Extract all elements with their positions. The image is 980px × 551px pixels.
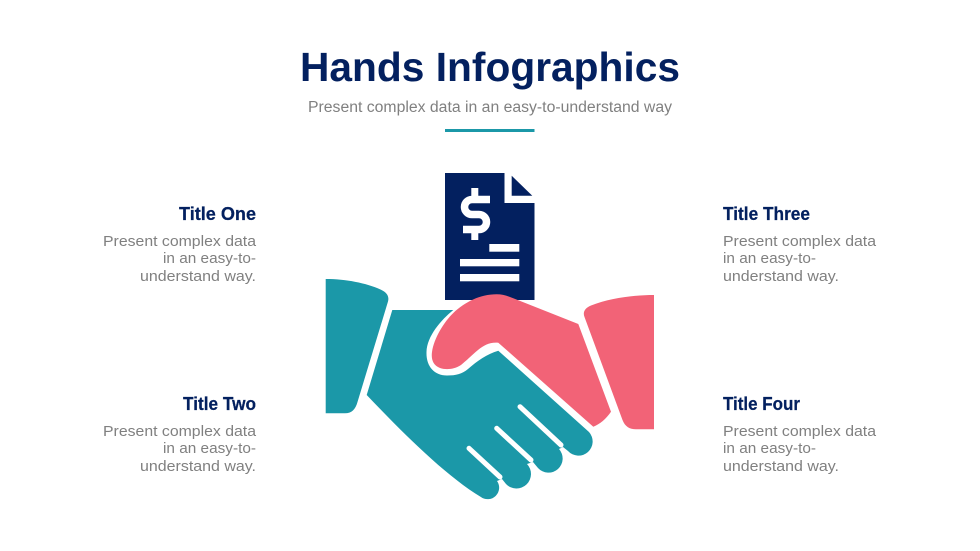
text block: Title One: understand way.	[140, 268, 256, 285]
finger gaps	[469, 407, 561, 477]
text block: Title Two: Title Two	[183, 394, 256, 414]
text block: Title One: Present complex data	[103, 233, 257, 250]
text block: Title Three: Title Three	[723, 204, 810, 224]
text block: Title Two: Present complex data	[103, 423, 257, 440]
text block: Title Three: in an easy-to-	[723, 250, 816, 267]
text block: Title One	[103, 204, 257, 285]
right cuff	[584, 295, 654, 429]
text block: Title Four: Title Four	[723, 394, 800, 414]
icon: invoice document with dollar sign	[445, 173, 534, 300]
text block: Title Two: in an easy-to-	[163, 440, 256, 457]
icon: handshake	[326, 279, 654, 499]
subtitle: Present complex data in an easy-to-understand way	[308, 99, 672, 116]
text block: Title One: Title One	[179, 204, 256, 224]
text block: Title Two: understand way.	[140, 458, 256, 475]
text block: Title Four	[723, 394, 877, 475]
text block: Title Four: Present complex data	[723, 423, 877, 440]
pink hand	[432, 294, 611, 427]
teal hand	[367, 310, 593, 499]
text block: Title One: in an easy-to-	[163, 250, 256, 267]
left cuff	[326, 279, 388, 413]
text block: Title Three: understand way.	[723, 268, 839, 285]
text block: Title Three	[723, 204, 877, 285]
title: Hands Infographics	[300, 44, 680, 90]
title underline accent	[445, 129, 534, 132]
text block: Title Four: understand way.	[723, 458, 839, 475]
text block: Title Two	[103, 394, 257, 475]
text block: Title Four: in an easy-to-	[723, 440, 816, 457]
text block: Title Three: Present complex data	[723, 233, 877, 250]
